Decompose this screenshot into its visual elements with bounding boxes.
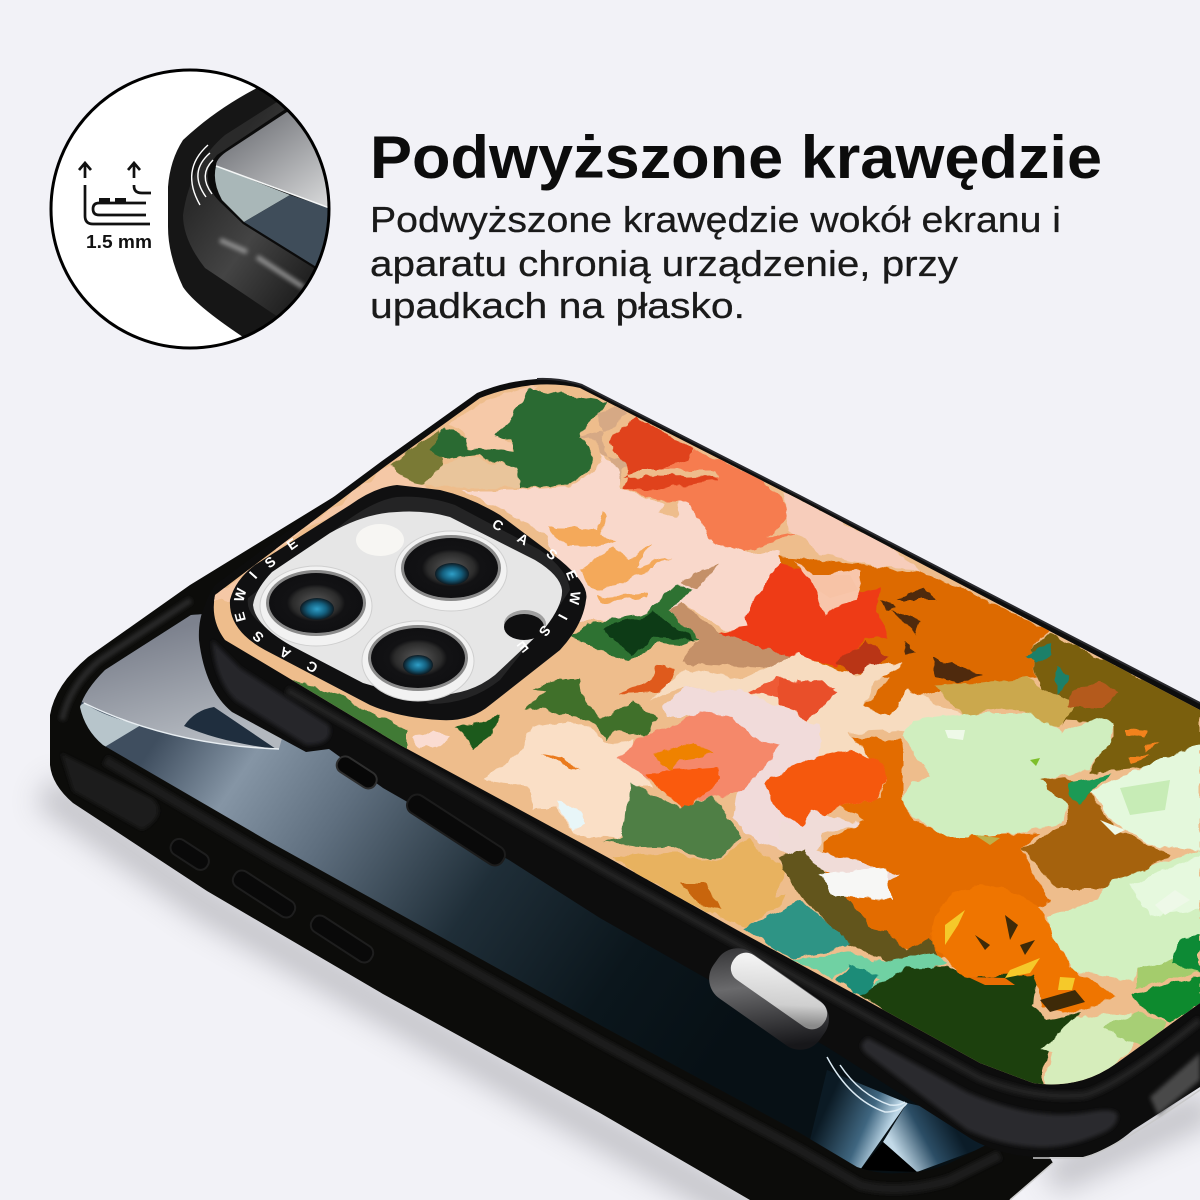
lens 2 bbox=[395, 531, 507, 611]
brand lettering CASEWISE: E bbox=[514, 638, 532, 656]
drop shadows bbox=[45, 790, 1200, 1200]
rear phone bbox=[50, 482, 1053, 1200]
body text: upadkach na płasko. bbox=[370, 285, 745, 326]
brand lettering CASEWISE: I bbox=[555, 612, 571, 622]
front phone case frame bbox=[199, 379, 1200, 1158]
brand lettering CASEWISE: W bbox=[231, 586, 250, 603]
brand lettering CASEWISE: C bbox=[490, 516, 506, 534]
flash bbox=[356, 524, 404, 556]
inset circle: raised edge close-up bbox=[50, 68, 330, 350]
brand lettering CASEWISE: S bbox=[536, 622, 554, 640]
brand lettering CASEWISE: E bbox=[284, 535, 300, 553]
icon: raised edge diagram with arrows bbox=[79, 163, 151, 224]
brand lettering CASEWISE: A bbox=[277, 644, 293, 662]
body text: Podwyższone krawędzie wokół ekranu i bbox=[370, 199, 1061, 240]
body text bbox=[370, 199, 1061, 326]
power button bbox=[404, 791, 508, 869]
brand lettering CASEWISE bbox=[231, 516, 584, 676]
brand lettering CASEWISE: S bbox=[261, 553, 279, 571]
artwork: centre greens and browns bbox=[285, 562, 800, 750]
charging port bbox=[700, 939, 838, 1059]
floral artwork bbox=[190, 370, 1200, 1100]
small side button bbox=[334, 753, 380, 792]
artwork: central peony blooms bbox=[483, 653, 967, 850]
artwork: orange field bbox=[717, 557, 1050, 717]
microphone hole bbox=[504, 610, 546, 640]
camera plateau bbox=[253, 512, 562, 695]
brand lettering CASEWISE: E bbox=[231, 610, 249, 624]
lens 1 bbox=[260, 566, 372, 646]
brand lettering CASEWISE: S bbox=[249, 628, 267, 646]
icon label: 1.5 mm bbox=[86, 232, 152, 252]
brand lettering CASEWISE: W bbox=[566, 590, 584, 606]
body text: aparatu chronią urządzenie, przy bbox=[370, 243, 958, 284]
brand lettering CASEWISE: C bbox=[304, 658, 320, 676]
artwork: small highlights and marks bbox=[813, 575, 1190, 1012]
brand lettering CASEWISE: A bbox=[515, 530, 531, 548]
camera bump bbox=[230, 485, 586, 720]
heading: Podwyższone krawędzie bbox=[370, 124, 1102, 191]
rear phone side buttons bbox=[167, 836, 376, 966]
artwork: lower blooms bbox=[603, 783, 1200, 1090]
rear phone screen bbox=[80, 614, 984, 1174]
artwork: orange and olive right side bbox=[763, 633, 1200, 960]
brand lettering CASEWISE: E bbox=[563, 568, 581, 582]
artwork: upper left blooms bbox=[210, 385, 920, 637]
lens 3 bbox=[362, 621, 474, 701]
brand lettering CASEWISE: I bbox=[246, 568, 260, 582]
brand lettering CASEWISE: S bbox=[543, 545, 561, 563]
